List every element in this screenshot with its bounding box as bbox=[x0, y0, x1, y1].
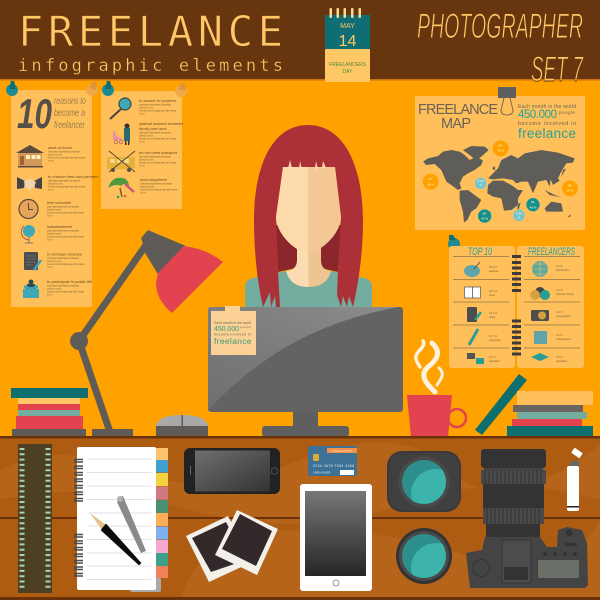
poster items text: Lorem ipsum dolor sit amet, consectetuer bbox=[47, 257, 79, 260]
credit card: LOREM IPSUM bbox=[331, 449, 353, 453]
notebook with tabs and pens bbox=[75, 447, 168, 592]
notebook headings: TOP 10 bbox=[468, 246, 493, 258]
poster items text: adipiscing elit. bbox=[47, 232, 62, 236]
notebook left values: 8,9 % bbox=[489, 355, 496, 359]
poster items text: Aenean commodo ligula eget dolor massa bbox=[47, 290, 85, 294]
silver pen bbox=[117, 496, 146, 553]
poster items text: family and work bbox=[139, 126, 168, 131]
poster items text: work at home bbox=[48, 145, 73, 150]
map percent badges: 30- bbox=[498, 144, 503, 148]
poster items text: to increase revenue bbox=[47, 252, 83, 256]
calendar: May 14 Freelancers Day: DAY bbox=[343, 69, 353, 75]
map heading bbox=[418, 102, 498, 132]
panel: freelance map bbox=[415, 87, 585, 230]
poster items text: Aenean commodo ligula eget dolor massa bbox=[139, 162, 177, 164]
USB flash drive bbox=[567, 448, 583, 511]
map heading: FREELANCE bbox=[418, 102, 498, 118]
notebook left values: translator bbox=[489, 359, 500, 363]
notebook left values bbox=[489, 265, 501, 363]
poster: 10 reasons to become a freelancer bbox=[11, 90, 98, 307]
subtitle: infographic elements bbox=[18, 56, 283, 76]
map percent badges: 40 % bbox=[530, 205, 537, 209]
smartphone bbox=[184, 448, 280, 494]
notebook left values: editor bbox=[489, 315, 496, 319]
shirt bbox=[245, 271, 372, 307]
poster items text: to participate in public life bbox=[47, 279, 93, 284]
pins on posters bbox=[6, 81, 460, 250]
poster items text: adipiscing elit. bbox=[139, 106, 154, 110]
poster items text: adipiscing elit. bbox=[48, 182, 63, 186]
computer mouse bbox=[156, 415, 208, 437]
sticky note on monitor: become involved in bbox=[214, 332, 251, 336]
poster items text: adipiscing elit. bbox=[140, 186, 155, 188]
poster items text: do not need transport bbox=[139, 150, 178, 155]
binder clip bbox=[498, 87, 516, 115]
poster items text: Lorem ipsum dolor sit amet, consectetuer bbox=[140, 182, 172, 186]
notebook right values: software design bbox=[556, 292, 575, 296]
teal ruler leaning on books bbox=[475, 374, 527, 435]
poster items text: Aenean commodo ligula eget dolor massa bbox=[140, 188, 178, 192]
calendar: May 14 Freelancers Day: FREELANCERS bbox=[329, 62, 367, 68]
notebook right values: 2,5 % bbox=[556, 355, 563, 359]
lens front bbox=[396, 528, 452, 584]
poster items text: adipiscing elit. bbox=[139, 134, 154, 138]
coffee cup with steam bbox=[407, 341, 466, 437]
desk lamp bbox=[70, 231, 223, 437]
notebook right values bbox=[556, 264, 575, 363]
map percent badges: 30- bbox=[428, 177, 433, 181]
icon: house bbox=[16, 145, 44, 168]
poster items text: Lorem ipsum dolor sit amet, consectetuer bbox=[139, 132, 171, 134]
poster items text: Lorem ipsum dolor sit amet, consectetuer bbox=[47, 206, 79, 208]
map percent badges: 40 % bbox=[427, 182, 434, 186]
poster items text: dolor bbox=[139, 164, 145, 168]
poster items text: dolor bbox=[47, 214, 53, 218]
notebook right values: education bbox=[556, 359, 568, 363]
big number 10: 10 bbox=[17, 90, 52, 137]
panel: top 10 freelancers notebook bbox=[449, 246, 584, 368]
poster items text: dolor bbox=[139, 112, 145, 116]
notebook left values: writer bbox=[489, 293, 495, 297]
map percent badges: 40 % bbox=[567, 188, 574, 192]
poster items text: Lorem ipsum dolor sit amet, consectetuer bbox=[47, 230, 79, 232]
map percent badges: 30- bbox=[568, 184, 572, 188]
colored tabs bbox=[156, 448, 168, 578]
poster items text: Aenean commodo ligula eget dolor massa bbox=[47, 236, 85, 238]
poster items text: dolor bbox=[140, 192, 146, 194]
poster heading: reasons to bbox=[54, 96, 86, 107]
calendar: May 14 Freelancers Day: 14 bbox=[339, 33, 356, 50]
poster items text: Aenean commodo ligula eget dolor massa bbox=[48, 156, 86, 160]
map percent badges: 0-20 bbox=[478, 179, 484, 183]
sticky note on monitor: Each month in the world bbox=[214, 321, 251, 325]
icon: clock bbox=[19, 200, 38, 218]
notebook left values: 18,2 % bbox=[489, 289, 498, 293]
poster items text: adipiscing elit. bbox=[47, 208, 62, 212]
notebook right values: architecture bbox=[556, 268, 570, 272]
poster items text: in search for projects bbox=[139, 98, 176, 103]
sticky note on monitor: people bbox=[240, 325, 251, 329]
sticky note on monitor: freelance bbox=[214, 336, 252, 346]
map percent badges: 0-20 bbox=[516, 211, 522, 215]
poster items text: dolor bbox=[47, 266, 53, 269]
map percent badges: 40 % bbox=[481, 216, 488, 220]
icon: palm beach bbox=[108, 178, 134, 198]
world map bbox=[423, 146, 575, 223]
monitor bbox=[208, 306, 403, 437]
tablet bbox=[300, 484, 372, 591]
notebook right values: 5,4 % bbox=[556, 264, 563, 268]
icon: magnifier bbox=[110, 98, 131, 119]
poster heading: freelancer bbox=[54, 120, 85, 131]
credit card bbox=[308, 446, 357, 476]
poster items text: to choose their own partners bbox=[48, 174, 98, 179]
map percent badges: 30- bbox=[531, 200, 535, 204]
notebook left values: 26,2 % bbox=[489, 265, 498, 269]
icon: notebook with pencil bbox=[24, 252, 41, 270]
steam bbox=[416, 341, 442, 392]
poster items text: dolor bbox=[139, 140, 145, 144]
icon: people group bbox=[23, 280, 39, 298]
icon: globe bbox=[21, 225, 35, 243]
notebook left icons bbox=[464, 262, 484, 364]
calendar: May 14 Freelancers Day bbox=[325, 8, 370, 82]
sticky note on monitor bbox=[211, 306, 256, 355]
instant photos bbox=[186, 510, 278, 582]
icon: handshake bbox=[17, 177, 42, 190]
spiral binding bbox=[75, 460, 83, 576]
poster items text: independence bbox=[47, 224, 73, 229]
map callout text: 450.000 bbox=[518, 109, 557, 121]
DSLR camera with telephoto lens bbox=[466, 449, 588, 588]
credit card: CARD HOLDER bbox=[313, 472, 331, 474]
icon: crossed-out bus bbox=[107, 151, 135, 172]
set title bbox=[417, 7, 584, 89]
map percent badges: % bbox=[518, 215, 521, 219]
stack of books left bbox=[11, 388, 88, 437]
poster items text: Aenean commodo ligula eget dolor massa bbox=[139, 138, 177, 140]
poster items text: Lorem ipsum dolor sit amet, consectetuer bbox=[139, 156, 171, 158]
poster items text: work anywhere bbox=[140, 177, 168, 182]
neck bbox=[286, 245, 308, 287]
hair bbox=[254, 125, 363, 307]
poster items text: Lorem ipsum dolor sit amet, consectetuer bbox=[48, 150, 80, 154]
poster items text: optimal balance between bbox=[139, 121, 184, 126]
map callout text: people bbox=[559, 110, 575, 115]
notebook right values: 2,6 % bbox=[556, 333, 563, 337]
poster items text: dolor bbox=[47, 238, 53, 242]
poster items text: dolor bbox=[48, 188, 54, 192]
notebook headings bbox=[468, 246, 575, 258]
poster heading bbox=[54, 96, 86, 131]
poster items text: adipiscing elit. bbox=[47, 260, 62, 263]
map percent badges: 30- bbox=[482, 211, 487, 215]
map callout text: Each month in the world bbox=[518, 104, 576, 110]
icon: woman with stroller bbox=[114, 124, 130, 145]
wooden desk bbox=[0, 436, 600, 600]
poster items text: Aenean commodo ligula eget dolor massa bbox=[47, 212, 85, 214]
poster items text: free schedule bbox=[47, 200, 72, 205]
notebook left values: designer bbox=[489, 269, 499, 273]
poster items text bbox=[47, 145, 98, 296]
notebook right icons bbox=[530, 261, 550, 361]
notebook right values: photographer bbox=[556, 314, 572, 318]
notebook right values: videographer bbox=[556, 337, 571, 341]
fringe tips bbox=[288, 160, 326, 169]
notebook left values: copywriter bbox=[489, 338, 501, 342]
freelancer woman bbox=[245, 125, 372, 307]
sticky note on monitor: 450.000 bbox=[214, 326, 239, 333]
poster items text: Lorem ipsum dolor sit amet, consectetuer bbox=[139, 104, 171, 106]
poster items text: dolor bbox=[47, 294, 53, 296]
title: FREELANCE bbox=[18, 7, 283, 56]
notebook spiral rings bbox=[512, 255, 521, 356]
hair back bbox=[276, 225, 341, 272]
notebook left values: 10,7 % bbox=[489, 334, 498, 338]
map heading: MAP bbox=[441, 116, 471, 132]
credit card: 5234 3678 7654 3456 bbox=[313, 464, 354, 468]
poster items text: Lorem ipsum dolor sit amet, consectetuer bbox=[48, 180, 80, 182]
poster items text: Aenean commodo ligula eget dolor massa bbox=[139, 110, 177, 112]
notebook right values: 2,9 % bbox=[556, 310, 563, 314]
poster items text: adipiscing elit. bbox=[47, 288, 62, 290]
poster items text: Aenean commodo ligula eget dolor massa bbox=[48, 186, 86, 188]
notebook left values: 12,7 % bbox=[489, 311, 498, 315]
lens hood bbox=[387, 451, 461, 512]
stack of books right bbox=[507, 391, 593, 437]
map percent badges bbox=[423, 140, 578, 223]
face bbox=[276, 167, 308, 254]
poster heading: become a bbox=[54, 108, 85, 119]
map percent badges: 40 % bbox=[497, 148, 504, 152]
header band bbox=[0, 0, 600, 89]
calendar: May 14 Freelancers Day: MAY bbox=[340, 23, 355, 30]
poster items text: dolor bbox=[48, 160, 54, 162]
map callout text: freelance bbox=[518, 126, 576, 141]
poster items text: adipiscing elit. bbox=[139, 158, 154, 162]
poster items text: Lorem ipsum dolor sit amet, consectetuer bbox=[47, 284, 79, 288]
poster items text: adipiscing elit. bbox=[48, 154, 63, 156]
film strip bbox=[18, 444, 52, 593]
map callout text: become involved in bbox=[518, 121, 576, 127]
notebook right values: 3,2 % bbox=[556, 288, 563, 292]
poster items text bbox=[139, 98, 184, 194]
poster items text: Aenean commodo ligula eget dolor massa bbox=[47, 263, 85, 266]
map callout text bbox=[518, 104, 576, 141]
fountain pen bbox=[90, 513, 140, 564]
map percent badges: % bbox=[479, 183, 482, 187]
poster: more reasons bbox=[101, 91, 184, 209]
